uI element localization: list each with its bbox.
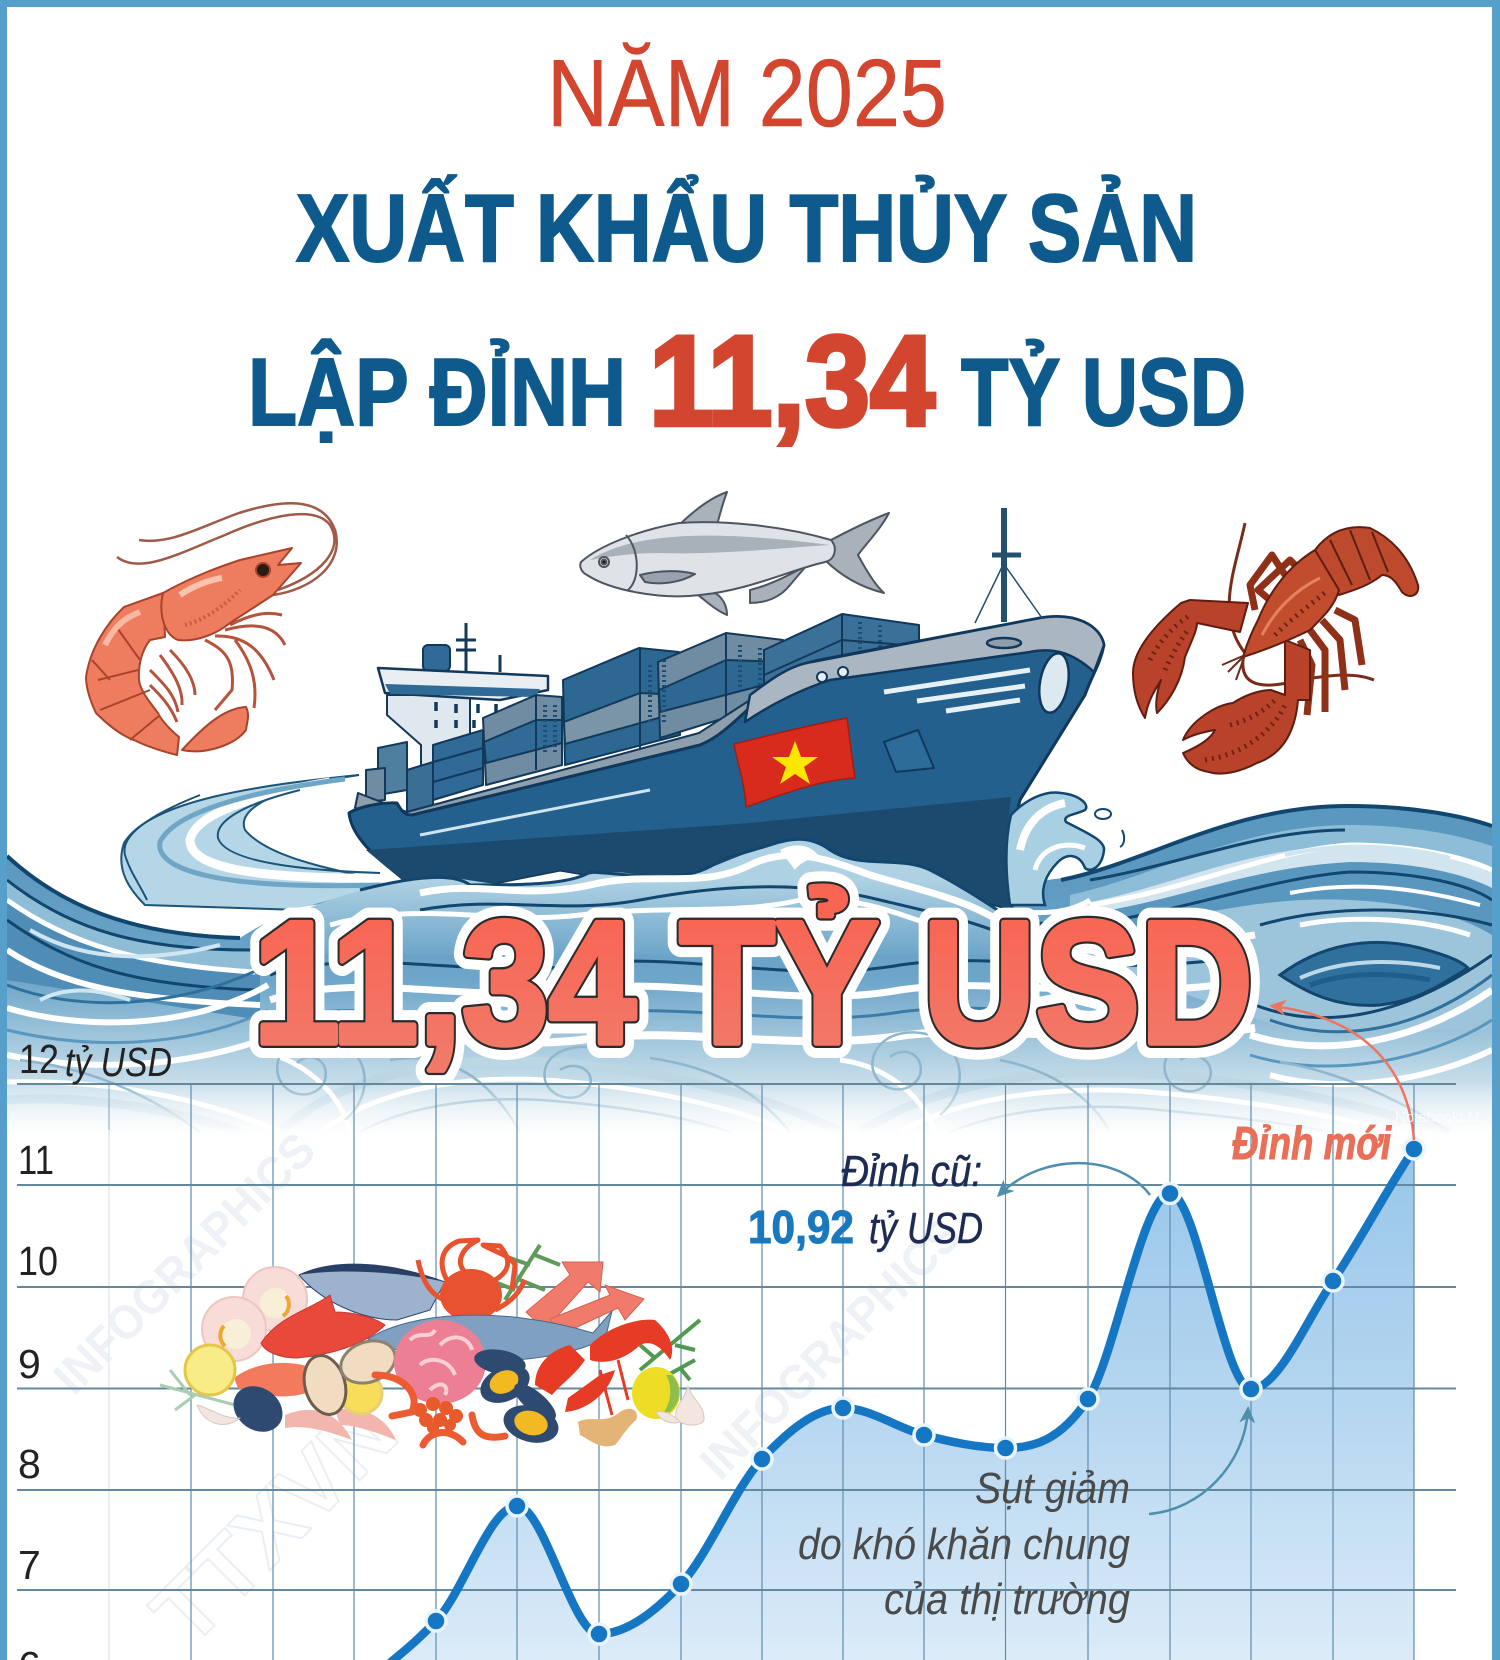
- callout: đỉnh cũ: Đỉnh cũ:: [841, 1147, 982, 1196]
- seafood: oysters: [298, 1334, 401, 1419]
- chart: y axis labels: 9: [18, 1341, 41, 1387]
- title: lập đỉnh 11,34 tỷ USD: 11,34: [649, 310, 935, 453]
- seafood: tuna: [299, 1265, 445, 1320]
- chart: data points: [426, 1139, 1424, 1644]
- seafood: mussels: [225, 1346, 563, 1449]
- lobster upper claw: [1133, 600, 1248, 718]
- chart: y axis labels: tỷ USD: [65, 1039, 172, 1085]
- seafood: red lobster: [535, 1320, 672, 1415]
- callout: đỉnh mới: Đỉnh mới: [1232, 1117, 1392, 1169]
- waves: left bands: [7, 880, 275, 1065]
- chart: y axis labels: 11: [18, 1137, 54, 1183]
- ship: hull details: [420, 638, 1073, 835]
- seafood: scallops: [202, 1267, 307, 1361]
- seafood: ginger: [578, 1409, 637, 1446]
- shrimp carapace: [161, 548, 301, 640]
- ship: grey bow deck: [745, 617, 1104, 722]
- illustration: ship wake swoosh: [121, 775, 400, 910]
- chart: watermarks: INFOGRAPHICS: [44, 1123, 326, 1405]
- ship: fore mast: [975, 508, 1042, 623]
- waves: center lines behind number: [265, 895, 1255, 1045]
- shrimp body: [86, 593, 179, 755]
- seafood: herbs: [160, 1245, 700, 1410]
- illustration: sea waves background: [7, 806, 1492, 1135]
- ship: hull: [349, 617, 1104, 910]
- big value: 11,34 tỷ USD: 11,34 TỶ USD: [253, 886, 1253, 1081]
- lobster antenna: [1229, 523, 1374, 685]
- shrimp antennae: [117, 503, 337, 595]
- chart: grid lines: [17, 1084, 1456, 1660]
- shrimp legs: [150, 613, 285, 722]
- callout: sụt giảm: [798, 1464, 1130, 1624]
- chart: area under line: [380, 1149, 1414, 1660]
- shrimp eye: [256, 563, 270, 577]
- seafood: caviar: [413, 1397, 463, 1434]
- seafood: salmon steak and fillets: [234, 1363, 396, 1440]
- fish dorsal fin: [679, 492, 727, 528]
- seafood: mackerel: [368, 1311, 612, 1361]
- illustration: lower pale swirls: [7, 1032, 1492, 1136]
- ship: deck railing: [355, 700, 760, 822]
- seafood: crab: [418, 1240, 525, 1321]
- chart: data line: [380, 1149, 1414, 1660]
- chart: y axis labels: [18, 1036, 172, 1660]
- lobster lower claw: [1183, 640, 1310, 774]
- title: xuất khẩu thủy sản: XUẤT KHẨU THỦY SẢN: [296, 174, 1197, 282]
- seafood: octopus: [394, 1320, 486, 1404]
- arrow: sụt giảm: [1149, 1409, 1248, 1514]
- chart: y axis labels: 8: [18, 1441, 41, 1487]
- lobster tail: [1315, 527, 1418, 596]
- big value: 11,34 tỷ USD: 11,34 TỶ USD: [253, 886, 1253, 1081]
- title: lập đỉnh 11,34 tỷ USD: LẬP ĐỈNH: [248, 338, 626, 446]
- callout: sụt giảm: do khó khăn chung: [798, 1520, 1130, 1569]
- shrimp tail fan: [182, 707, 248, 751]
- seafood: garlic: [197, 1386, 704, 1425]
- callout: đỉnh cũ: [748, 1147, 983, 1253]
- callout: sụt giảm: của thị trường: [884, 1575, 1130, 1624]
- fish tail: [825, 513, 889, 593]
- seafood: squid: [526, 1262, 644, 1335]
- seafood: small shrimp: [375, 1375, 505, 1445]
- illustration: seafood pile: [160, 1240, 704, 1449]
- illustration: shrimp: [86, 503, 337, 755]
- fish body: [580, 522, 835, 596]
- title: lập đỉnh 11,34 tỷ USD: [248, 310, 1246, 453]
- seafood: lemons: [185, 1345, 680, 1419]
- title: năm 2025: NĂM 2025: [547, 40, 947, 147]
- illustration: lobster: [1133, 523, 1418, 774]
- callout: sụt giảm: Sụt giảm: [975, 1464, 1130, 1513]
- ship: container stacks: [366, 614, 919, 812]
- waves: right bands: [1070, 825, 1492, 1084]
- fish lower fins: [698, 593, 727, 615]
- big value: 11,34 tỷ USD: 11,34 TỶ USD: [253, 886, 1253, 1081]
- arrow: đỉnh mới: [1272, 1006, 1414, 1140]
- callout: đỉnh cũ: 10,92: [748, 1201, 854, 1253]
- chart: y axis labels: 12: [19, 1036, 59, 1082]
- chart: y axis labels: 7: [18, 1542, 41, 1588]
- illustration: container ship: [349, 508, 1104, 910]
- ship: lower dark hull band: [366, 797, 1012, 910]
- chart: watermarks: TTXVN: [133, 1381, 416, 1660]
- seafood: red fish: [261, 1295, 385, 1358]
- illustration: fish: [580, 492, 889, 615]
- lobster legs: [1250, 555, 1362, 715]
- note: notebooklm mark: NotebookLM: [1395, 1109, 1480, 1126]
- illustration: bow splash and front waves: [260, 792, 1124, 955]
- ship: rear superstructure: [378, 623, 548, 770]
- chart: watermarks: INFOGRAPHICS: [690, 1208, 972, 1490]
- title: lập đỉnh 11,34 tỷ USD: TỶ USD: [961, 339, 1246, 446]
- chart: y axis labels: 10: [18, 1238, 58, 1284]
- ship: Vietnamese flag: [734, 718, 855, 807]
- arrow: đỉnh cũ: [999, 1163, 1150, 1195]
- chart: watermarks: [44, 1123, 972, 1660]
- lobster carapace: [1243, 550, 1339, 657]
- callout: đỉnh cũ: tỷ USD: [869, 1204, 983, 1253]
